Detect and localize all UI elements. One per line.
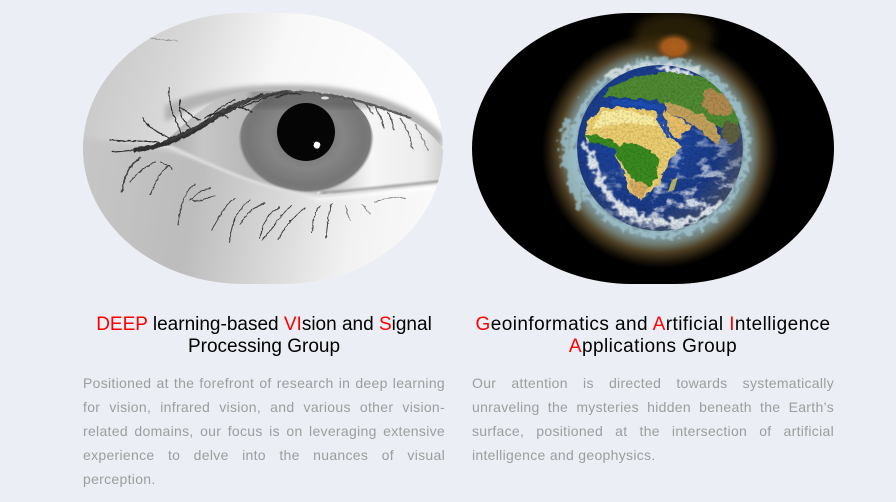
eyeball (166, 91, 443, 195)
text: GAIA group description: intelligence and geophysics. (472, 447, 656, 463)
heading: GAIA group: Applications Group (569, 336, 737, 357)
Africa (587, 107, 682, 200)
Atlantic cloud swirl (586, 68, 720, 222)
Eurasia (602, 73, 740, 146)
Southern Africa (628, 178, 649, 199)
photo: grayscale eye (83, 13, 443, 284)
lower lid rim (170, 146, 442, 196)
Arabia (662, 110, 692, 139)
Madagascar (668, 177, 678, 192)
text: DEEP group description (83, 375, 445, 487)
upper lashes (110, 88, 428, 152)
text: DEEP group description: Positioned at the forefront of research in deep learning (83, 375, 445, 391)
Red Sea (657, 118, 669, 138)
upper eyelid crease (165, 85, 443, 150)
lower face skin (83, 140, 407, 284)
iris (238, 93, 374, 192)
catchlight (314, 142, 320, 148)
small reflections (317, 96, 333, 194)
Mediterranean (610, 101, 662, 108)
lower lashes (122, 158, 405, 242)
text: DEEP group description: related domains, our focus is on leveraging extensive (83, 423, 445, 439)
cloud texture (590, 114, 742, 230)
text: DEEP group description: for vision, infrared vision, and various other vision- (83, 399, 445, 415)
globe (577, 65, 743, 231)
text: GAIA group description: Our attention is directed towards systematically (472, 375, 834, 391)
heading: DEEP group: DEEP learning-based VIsion and Signal (96, 314, 432, 335)
cloud fringe (565, 61, 747, 235)
text: DEEP group description: experience to delve into the nuances of visual (83, 447, 445, 463)
heading: GAIA group (476, 314, 830, 357)
pupil (277, 103, 335, 161)
heading: DEEP group (96, 314, 432, 357)
heading: DEEP group: Processing Group (188, 336, 340, 357)
photo: earth in space (472, 12, 834, 284)
equatorial forest (586, 133, 658, 186)
brow hair (144, 38, 178, 41)
sun glow at the top (634, 12, 714, 62)
images: eye and earth (83, 13, 834, 284)
text: GAIA group description: surface, positioned at the intersection of artificial (472, 423, 834, 439)
heading: GAIA group: Geoinformatics and Artificial Intelligence (476, 314, 830, 335)
text: GAIA group description: unraveling the mysteries hidden beneath the Earth’s (472, 399, 834, 415)
land and ocean speckle (577, 65, 743, 231)
text: DEEP group description: perception. (83, 471, 156, 487)
text: GAIA group description (472, 375, 834, 463)
atmospheric glow (542, 32, 778, 268)
